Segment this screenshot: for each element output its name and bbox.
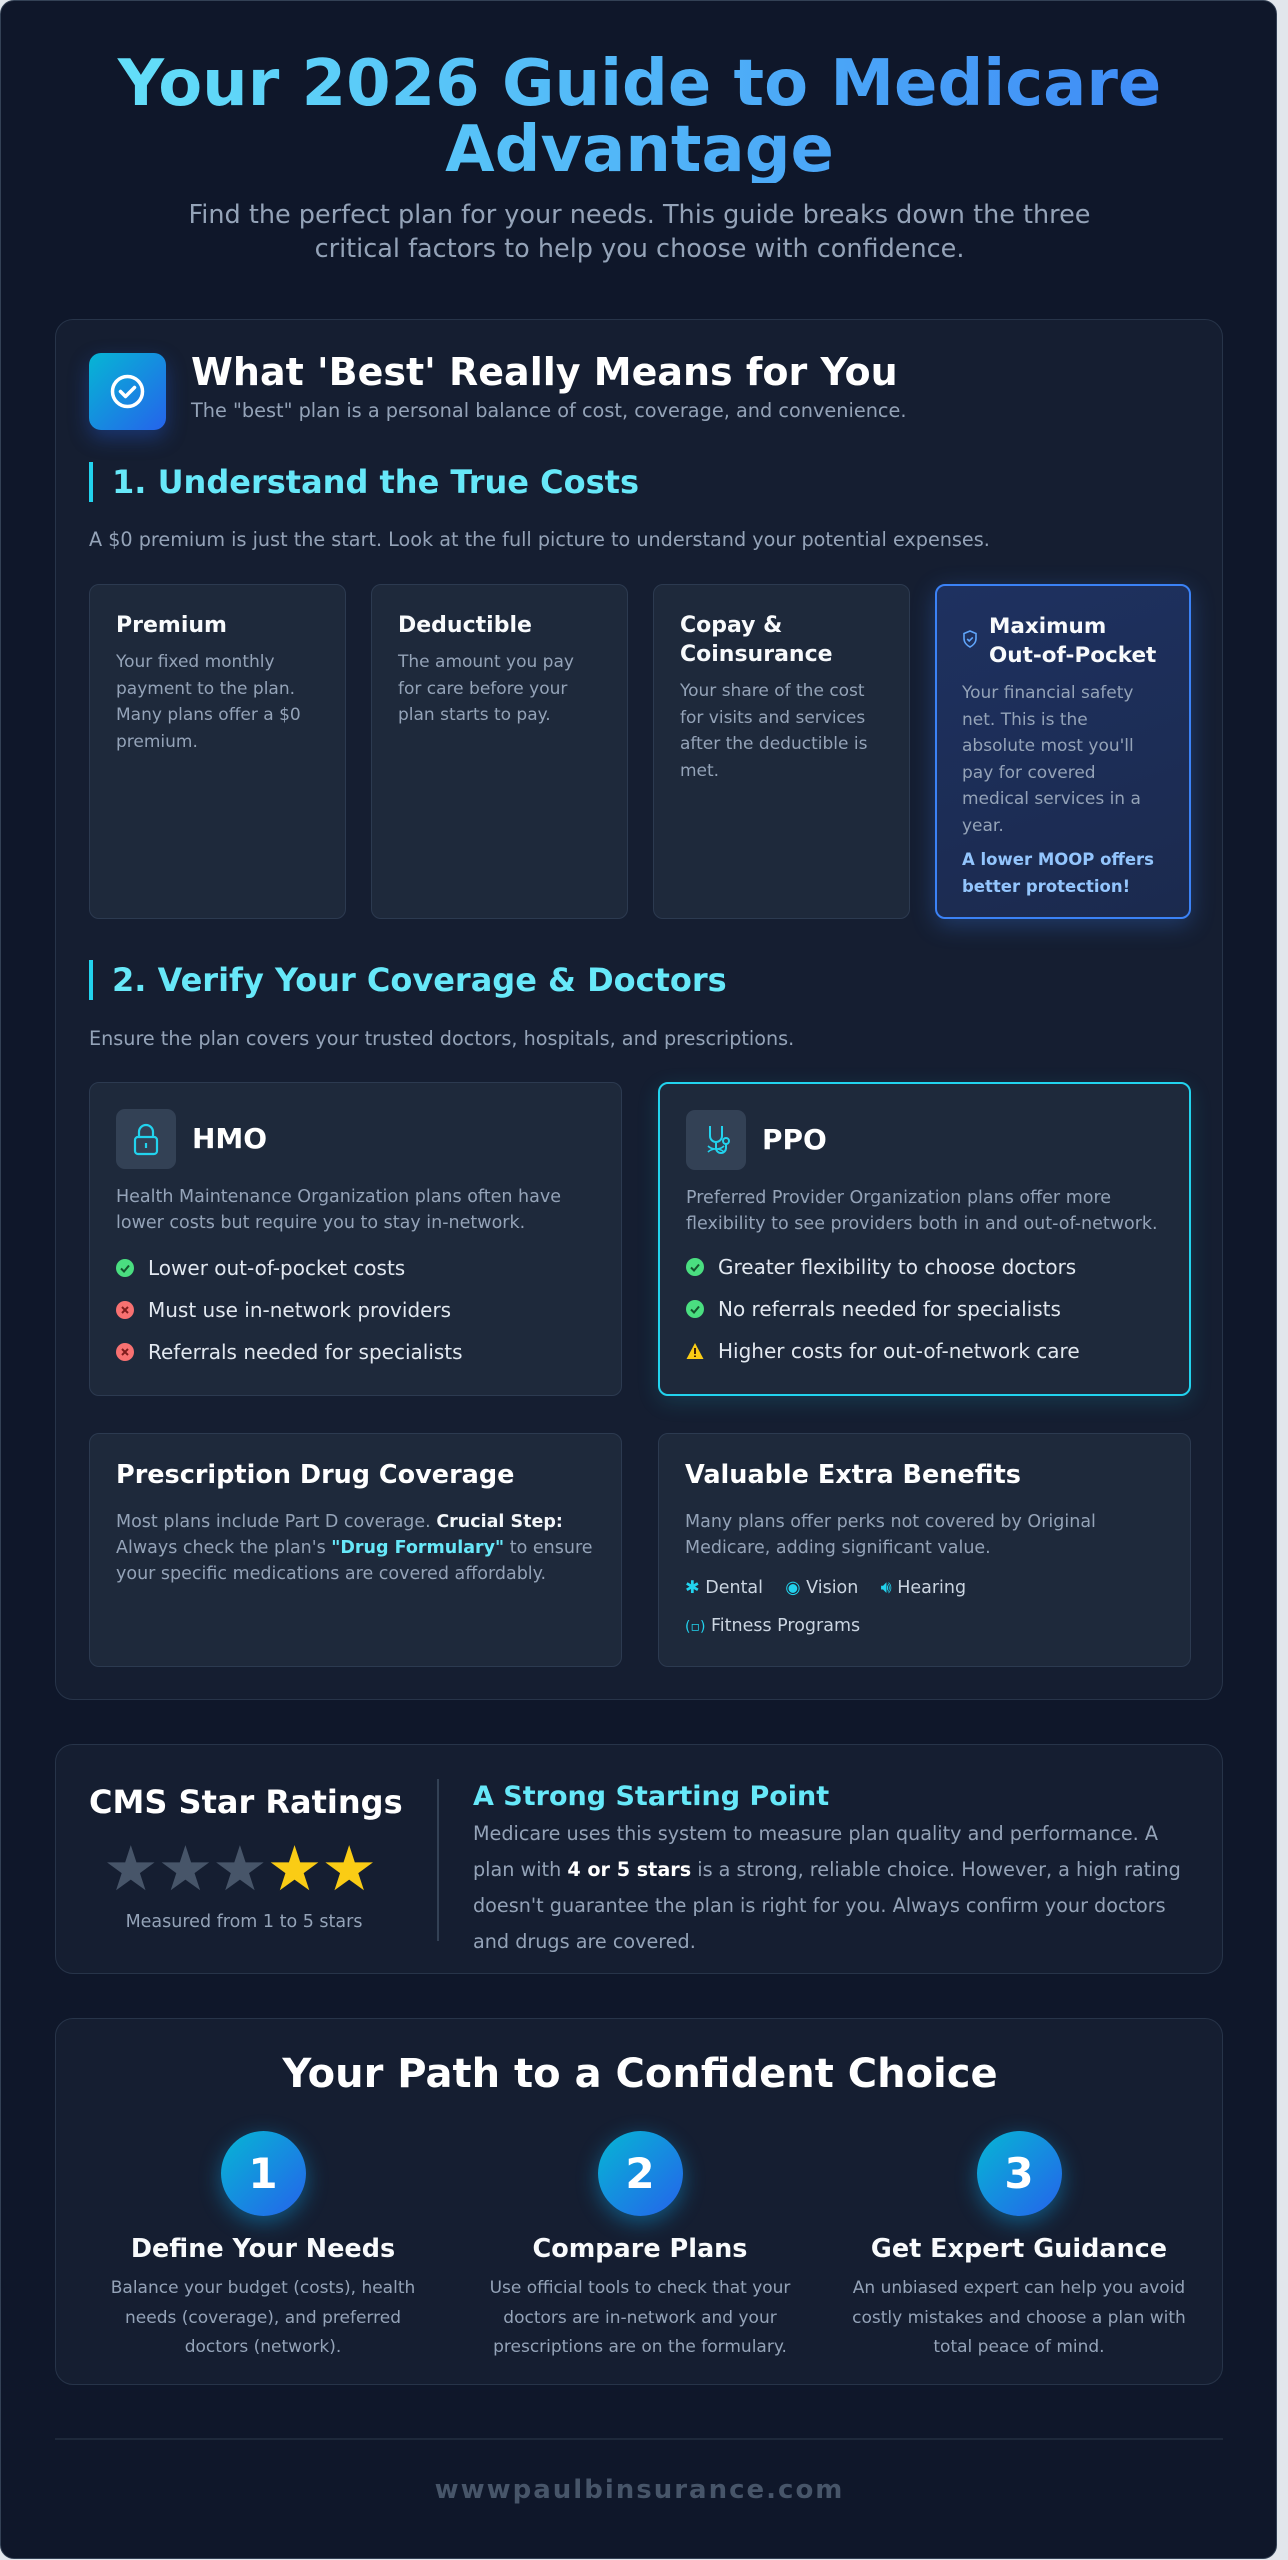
step 1 (111, 2126, 415, 2357)
card: premium: Your fixed monthly payment to the plan. Many plans offer a $0 premium. (116, 652, 301, 752)
card: copay (653, 584, 910, 919)
icon: lock (116, 1109, 176, 1169)
panel: CMS star ratings (55, 1744, 1223, 1974)
panel: CMS star ratings: Measured from 1 to 5 stars (126, 1912, 362, 1932)
title: Advantage (445, 113, 834, 187)
card: copay: Copay & Coinsurance (680, 613, 833, 667)
list: HMO pros cons (116, 1256, 463, 1364)
card: prescription drug (89, 1433, 622, 1667)
panel: path to confident choice: Your Path to a Confident Choice (282, 2051, 998, 2097)
section 2 description: Ensure the plan covers your trusted doctors, hospitals, and prescriptions. (89, 1027, 794, 1050)
icon: stethoscope (686, 1110, 746, 1170)
panel: what best means (55, 319, 1223, 1700)
card: HMO (89, 1082, 622, 1396)
card: extra benefits: Valuable Extra Benefits (685, 1460, 1021, 1490)
strong starting point text: Medicare uses this system to measure plan quality and performance. A plan with 4 or 5 stars is a strong, reliable choice. However, a high rating doesn't guarantee the plan is right for you. Always confirm your doctors and drugs are covered. (473, 1822, 1181, 1953)
card: PPO: Preferred Provider Organization plans offer more flexibility to see providers both in and out-of-network. (686, 1188, 1158, 1234)
step 3: An unbiased expert can help you avoid costly mistakes and choose a plan with total peace of mind. (852, 2278, 1186, 2357)
card: copay: Your share of the cost for visits and services after the deductible is met. (680, 681, 867, 780)
card: prescription drug: Most plans include Part D coverage. Crucial Step: Always check the plan's "Drug Formulary" to ensure your specific medications are covered affordably. (116, 1512, 593, 1584)
section 1 heading: 1. Understand the True Costs (112, 463, 639, 501)
card: deductible: Deductible (398, 613, 532, 638)
list: HMO pros cons: Referrals needed for specialists (148, 1340, 463, 1364)
card: deductible: The amount you pay for care before your plan starts to pay. (398, 652, 574, 725)
step 2 (490, 2126, 790, 2357)
stars: ★★★★★ (103, 1832, 376, 1905)
panel: CMS star ratings: CMS Star Ratings (89, 1783, 403, 1821)
step 2: Use official tools to check that your doctors are in-network and your prescriptions are on the formulary. (490, 2278, 790, 2357)
intro text: The "best" plan is a personal balance of cost, coverage, and convenience. (191, 399, 907, 422)
strong starting point text: A Strong Starting Point (473, 1781, 829, 1812)
step 1: Define Your Needs (131, 2234, 395, 2264)
list: PPO pros cons: No referrals needed for specialists (718, 1297, 1061, 1321)
card: HMO: Health Maintenance Organization plans often have lower costs but require you to stay in-network. (116, 1187, 561, 1233)
step 1: 1 (248, 2149, 278, 2198)
icon: shield (963, 630, 977, 648)
card: prescription drug: Prescription Drug Coverage (116, 1460, 514, 1490)
card: PPO: PPO (762, 1123, 827, 1156)
footer url: wwwpaulbinsurance.com (435, 2475, 844, 2505)
card: MOOP highlight: Out-of-Pocket (989, 643, 1156, 668)
card: premium: Premium (116, 613, 227, 638)
card: PPO (658, 1082, 1191, 1396)
card: HMO: HMO (192, 1122, 267, 1155)
list: HMO pros cons: Must use in-network providers (148, 1298, 451, 1322)
card: MOOP highlight: Your financial safety net. This is the absolute most you'll pay for covered medical services in a year. (962, 683, 1141, 836)
panel: path to confident choice (55, 2018, 1223, 2385)
subtitle: Find the perfect plan for your needs. This guide breaks down the three critical factors to help you choose with confidence. (188, 200, 1090, 264)
list: PPO pros cons (686, 1255, 1080, 1363)
benefit icons: ✱ Dental ◉ Vision 🔊︎ Hearing (685, 1578, 966, 1598)
title: Your 2026 Guide to Medicare (118, 47, 1161, 121)
benefit icons (685, 1578, 966, 1636)
step 2: Compare Plans (532, 2234, 747, 2264)
list: PPO pros cons: Greater flexibility to choose doctors (718, 1255, 1076, 1279)
heading: What 'Best' Really Means for You (191, 350, 898, 394)
section 1 description: A $0 premium is just the start. Look at the full picture to understand your potential expenses. (89, 528, 990, 551)
icon: check badge (89, 353, 166, 430)
card: MOOP highlight: Maximum (989, 614, 1106, 639)
list: PPO pros cons: Higher costs for out-of-network care (718, 1339, 1080, 1363)
benefit icons: (▫) Fitness Programs (685, 1616, 860, 1636)
card: premium (89, 584, 346, 919)
card: deductible (371, 584, 628, 919)
step 1: Balance your budget (costs), health needs (coverage), and preferred doctors (network). (111, 2278, 415, 2357)
card: extra benefits (658, 1433, 1191, 1667)
step 3: Get Expert Guidance (871, 2234, 1167, 2264)
title (1, 51, 1278, 183)
card: MOOP highlight: A lower MOOP offers better protection! (962, 850, 1154, 896)
section 2 heading: 2. Verify Your Coverage & Doctors (112, 961, 727, 999)
card: extra benefits: Many plans offer perks not covered by Original Medicare, adding significant value. (685, 1512, 1096, 1558)
step 2: 2 (625, 2149, 655, 2198)
step 3 (852, 2126, 1186, 2357)
step 3: 3 (1004, 2149, 1034, 2198)
list: HMO pros cons: Lower out-of-pocket costs (148, 1256, 405, 1280)
card: MOOP highlight (935, 584, 1191, 919)
